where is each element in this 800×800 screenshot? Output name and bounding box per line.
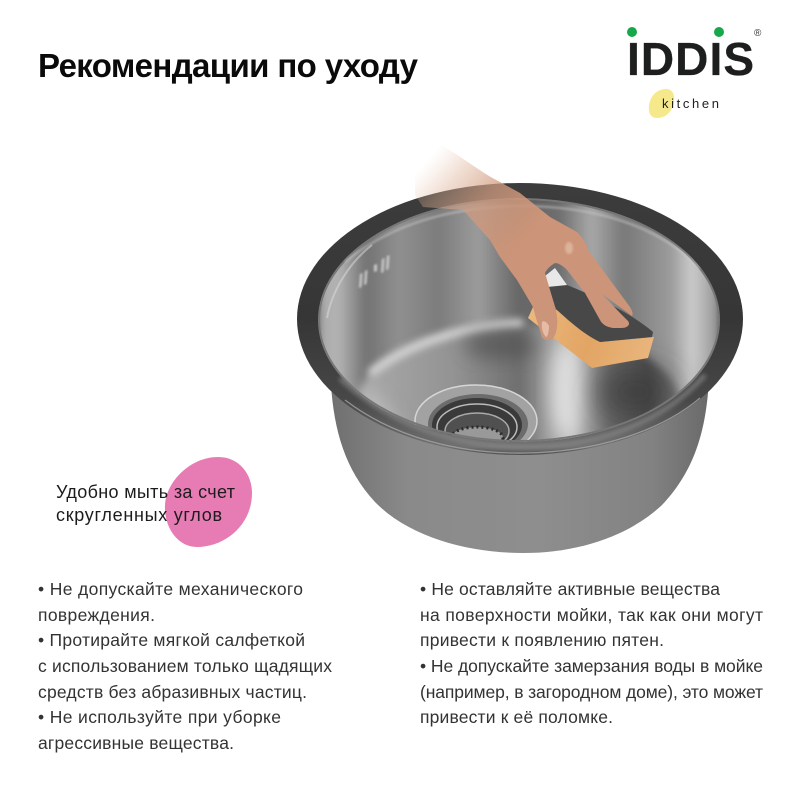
right care tips: привести к появлению пятен.	[420, 630, 664, 650]
right care tips: на поверхности мойки, так как они могут	[420, 605, 763, 625]
left care tips: • Не допускайте механического	[38, 579, 303, 599]
sink outer body	[331, 380, 709, 553]
sink illustration	[297, 140, 743, 553]
right care tips	[420, 579, 763, 727]
sponge	[528, 285, 654, 368]
callout text: скругленных углов	[56, 505, 222, 525]
left care tips: средств без абразивных частиц.	[38, 682, 307, 702]
bowl floor	[358, 322, 680, 442]
left care tips: • Протирайте мягкой салфеткой	[38, 630, 305, 650]
left care tips	[38, 579, 332, 753]
right care tips: • Не оставляйте активные вещества	[420, 579, 720, 599]
white gap between fingers	[545, 268, 567, 287]
inner rim reflections	[319, 199, 719, 441]
registered mark: ®	[754, 28, 762, 39]
rim sheen	[340, 375, 705, 447]
right care tips: (например, в загородном доме), это может	[420, 682, 763, 702]
embossed mark	[359, 255, 390, 288]
hand with fading forearm	[415, 140, 633, 340]
logo: IDDIS kitchen	[627, 27, 762, 118]
left care tips: повреждения.	[38, 605, 155, 625]
pink blob	[165, 457, 252, 547]
right care tips: привести к её поломке.	[420, 707, 613, 727]
title: Рекомендации по уходу	[38, 47, 419, 84]
logo yellow blob	[649, 89, 674, 118]
front rim highlight	[345, 398, 700, 453]
callout text	[56, 482, 235, 525]
sink rim	[297, 183, 743, 455]
left care tips: с использованием только щадящих	[38, 656, 332, 676]
logo green dots	[627, 27, 724, 37]
logo wordmark: IDDIS	[627, 33, 754, 85]
callout text: Удобно мыть за счет	[56, 482, 235, 502]
sink bowl interior	[318, 198, 720, 442]
logo kitchen label: kitchen	[662, 96, 719, 111]
left care tips: агрессивные вещества.	[38, 733, 234, 753]
floor highlight arc	[372, 323, 520, 372]
right care tips: • Не допускайте замерзания воды в мойке	[420, 656, 763, 676]
left care tips: • Не используйте при уборке	[38, 707, 281, 727]
drain	[414, 384, 538, 442]
